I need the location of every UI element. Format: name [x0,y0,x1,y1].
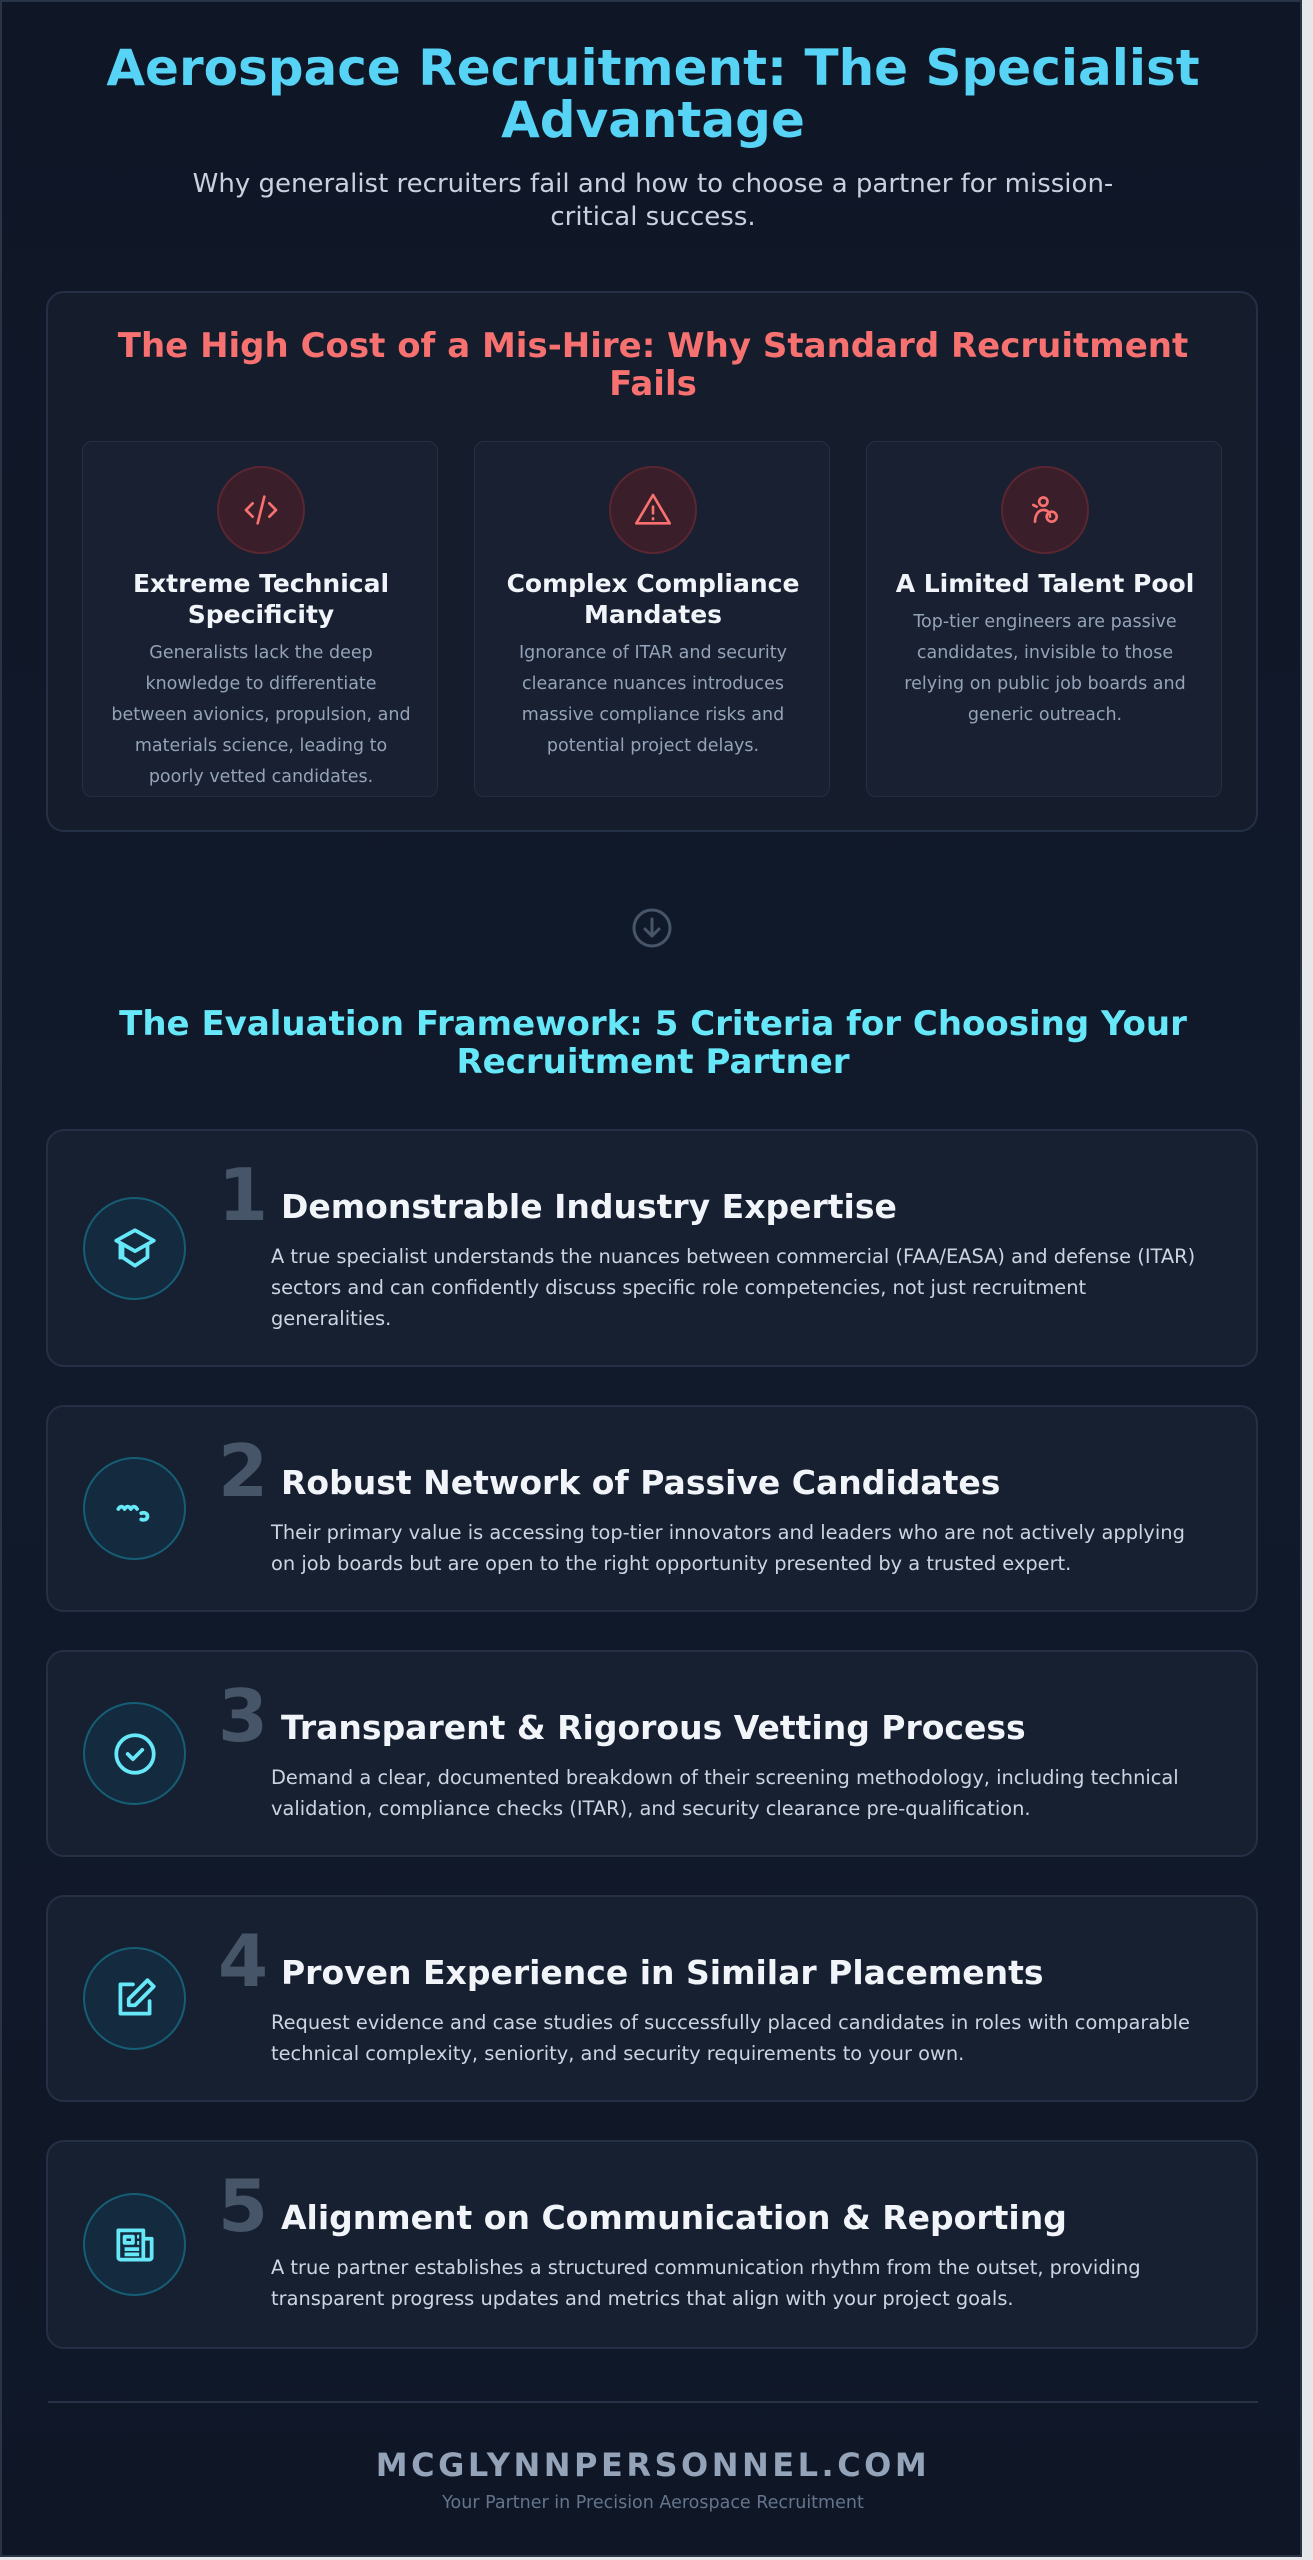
icon: pencil [83,1947,186,2050]
subtitle [193,169,1113,232]
card title: A Limited Talent Pool [896,569,1194,598]
footer brand: MCGLYNNPERSONNEL.COM [376,2446,930,2484]
card: talent pool [866,441,1222,797]
number: 1 [218,1153,268,1237]
criterion text: Demand a clear, documented breakdown of their screening methodology, including technical validation, compliance checks (ITAR), and security clearance pre-qualification. [271,1766,1179,1820]
subtitle: critical success. [550,202,756,232]
criterion 3 [46,1650,1258,1857]
criterion title: Robust Network of Passive Candidates [281,1463,1000,1502]
criterion 5 [46,2140,1258,2349]
panel: high cost of mis-hire [46,291,1258,832]
subtitle: Why generalist recruiters fail and how to choose a partner for mission- [193,169,1113,199]
number: 3 [218,1674,268,1758]
icon: warning [609,466,697,554]
card title: Complex Compliance Mandates [507,569,799,629]
icon: graduation cap [83,1197,186,1300]
criterion title: Transparent & Rigorous Vetting Process [281,1708,1026,1747]
number: 5 [218,2164,268,2248]
criterion text: A true specialist understands the nuances between commercial (FAA/EASA) and defense (ITAR) sectors and can confidently discuss specific role competencies, not just recruitment generalities. [271,1245,1195,1330]
icon: newspaper [83,2193,186,2296]
card text: Top-tier engineers are passive candidates, invisible to those relying on public job boards and generic outreach. [904,612,1186,725]
heading: high cost [118,326,1188,404]
criterion 4 [46,1895,1258,2102]
card title: Extreme Technical Specificity [133,569,389,629]
criterion title: Proven Experience in Similar Placements [281,1953,1044,1992]
criterion 1 [46,1129,1258,1367]
card text: Generalists lack the deep knowledge to differentiate between avionics, propulsion, and materials science, leading to poorly vetted candidates. [111,643,411,787]
card: compliance [474,441,830,797]
card text: Ignorance of ITAR and security clearance nuances introduces massive compliance risks and potential project delays. [519,643,787,756]
icon: check [83,1702,186,1805]
heading: evaluation framework [119,1004,1187,1082]
criterion text: Their primary value is accessing top-tier innovators and leaders who are not actively applying on job boards but are open to the right opportunity presented by a trusted expert. [271,1521,1185,1575]
heading: high cost: Fails [609,364,697,404]
criterion title: Alignment on Communication & Reporting [281,2198,1067,2237]
heading: evaluation framework: Recruitment Partner [456,1042,850,1082]
title [106,39,1200,149]
card: technical specificity [82,441,438,797]
criterion text: Request evidence and case studies of successfully placed candidates in roles with comparable technical complexity, seniority, and security requirements to your own. [271,2011,1190,2065]
footer tagline: Your Partner in Precision Aerospace Recruitment [442,2493,864,2513]
icon: people [1001,466,1089,554]
title: Aerospace Recruitment: The Specialist [106,39,1200,97]
icon: code [217,466,305,554]
criterion title: Demonstrable Industry Expertise [281,1187,897,1226]
criterion 2 [46,1405,1258,1612]
heading: high cost: The High Cost of a Mis-Hire: Why Standard Recruitment [118,326,1188,366]
icon: network [83,1457,186,1560]
title: Advantage [501,91,805,149]
arrow: down [632,908,672,948]
number: 4 [218,1919,268,2003]
heading: evaluation framework: The Evaluation Framework: 5 Criteria for Choosing Your [119,1004,1187,1044]
criterion text: A true partner establishes a structured communication rhythm from the outset, providing transparent progress updates and metrics that align with your project goals. [271,2256,1141,2310]
number: 2 [218,1429,268,1513]
